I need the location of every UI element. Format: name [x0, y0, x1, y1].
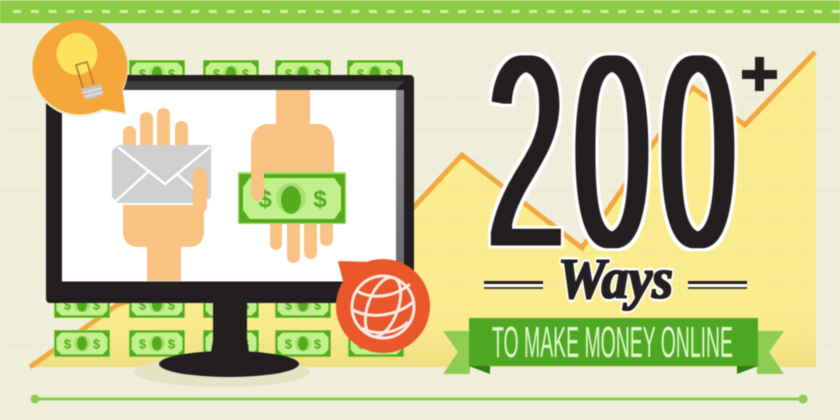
icon: bulb [56, 33, 103, 100]
plus sign [742, 57, 777, 91]
top stitched band [0, 0, 840, 23]
icon: envelope [112, 145, 211, 203]
money bills grid [54, 60, 404, 357]
bottom divider line [30, 394, 808, 404]
monitor [46, 75, 414, 387]
icon: globe [352, 273, 414, 341]
callout: light bulb [32, 20, 128, 117]
heading: Ways: Ways [558, 246, 673, 311]
icon: dollar bill: $ [313, 186, 327, 213]
callout: globe [336, 259, 430, 353]
title: 200+ [488, 0, 736, 307]
title: 200+: 2 [488, 0, 564, 307]
icon: dollar bill: $ [258, 186, 272, 213]
heading rules [484, 281, 747, 289]
heading: Ways: Ways [558, 246, 673, 311]
hand holding envelope [112, 108, 211, 281]
ribbon banner [443, 318, 784, 374]
hand receiving money [238, 90, 346, 263]
title: 200+: 0 [660, 0, 736, 307]
title: 200+: 0 [574, 0, 650, 307]
icon: dollar bill [238, 172, 346, 224]
